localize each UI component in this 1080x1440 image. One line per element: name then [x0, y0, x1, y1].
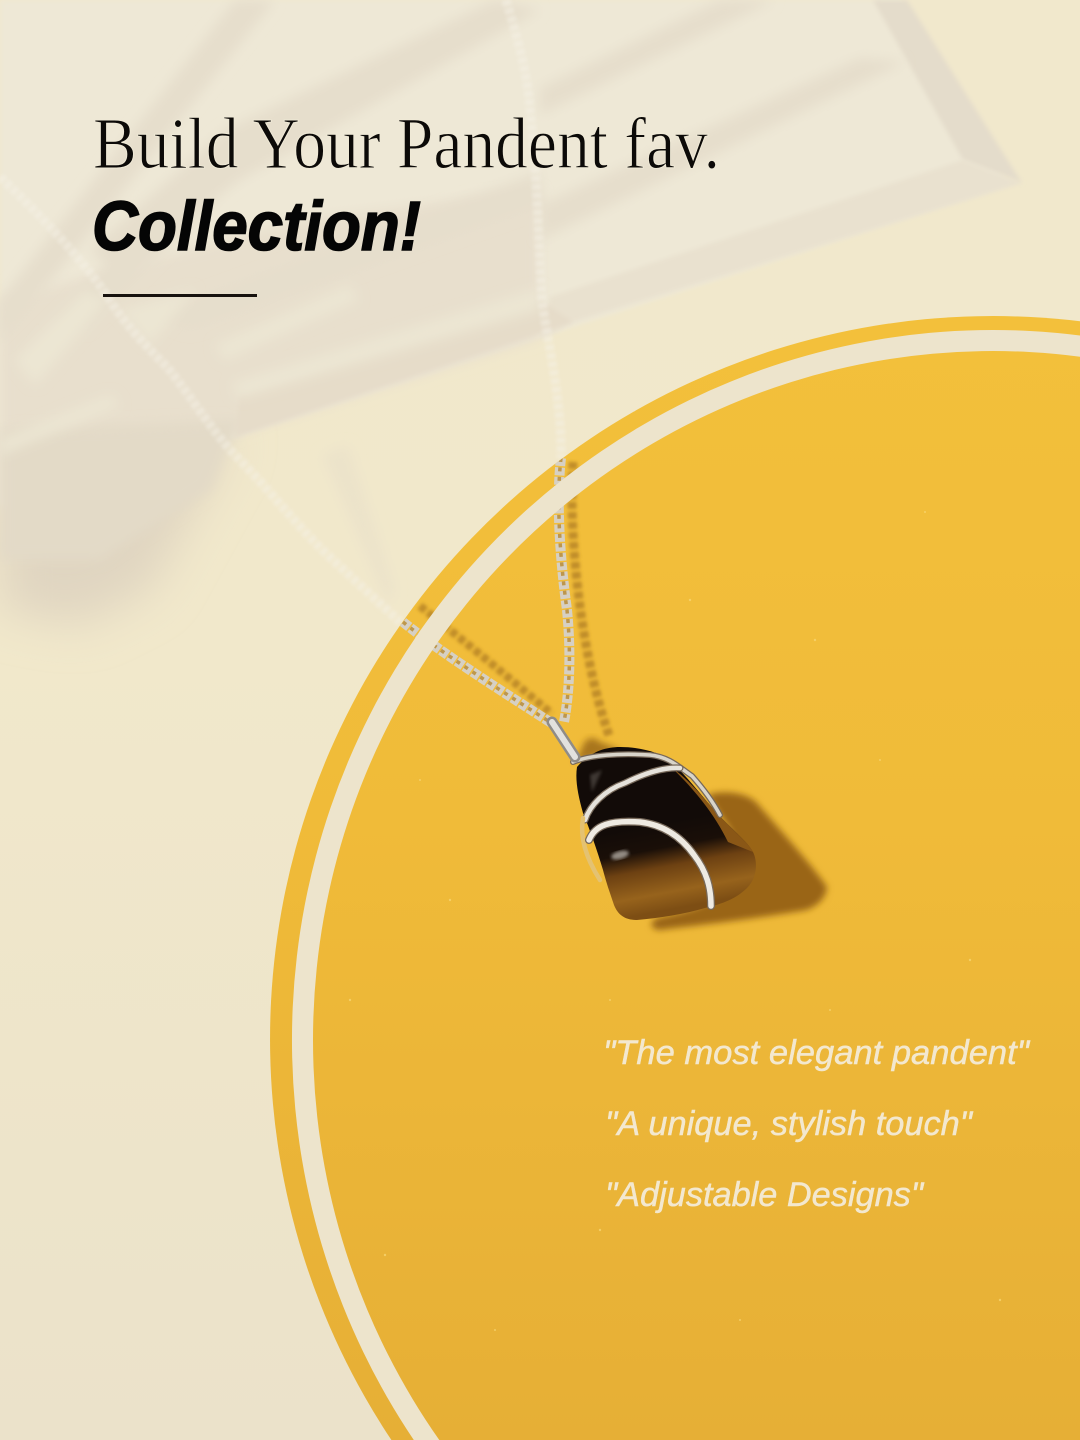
faded chain on cream: [0, 0, 561, 622]
stone: [576, 747, 756, 920]
title line 1: Build Your Pandent fav.: [93, 103, 720, 184]
light streaks: [0, 285, 540, 455]
soft blob: [0, 435, 235, 625]
lit panes: [0, 0, 1008, 505]
yellow circle: [270, 316, 1080, 1440]
quote 2: "A unique, stylish touch": [605, 1105, 974, 1143]
stone highlight: [610, 849, 630, 861]
faint stem shadow: [322, 445, 395, 605]
quote 1: "The most elegant pandent": [603, 1034, 1031, 1072]
quotes: [603, 1034, 1031, 1214]
paper specks: [349, 511, 1001, 1331]
wires: [552, 722, 720, 906]
silver chain: [403, 458, 569, 724]
title underline: [103, 294, 257, 297]
frame bands: [873, 0, 1022, 183]
quote 3: "Adjustable Designs": [605, 1176, 925, 1214]
cream ring: [292, 330, 1080, 1440]
title line 2: Collection!: [92, 187, 421, 265]
pendant shadow: [651, 792, 827, 930]
leaf shadows: [0, 0, 1022, 625]
lower shaded region: [0, 190, 540, 510]
pendant: [552, 722, 827, 930]
chain shadow: [420, 462, 610, 738]
brown facet: [672, 768, 753, 852]
pane dark bands: [0, 0, 905, 345]
